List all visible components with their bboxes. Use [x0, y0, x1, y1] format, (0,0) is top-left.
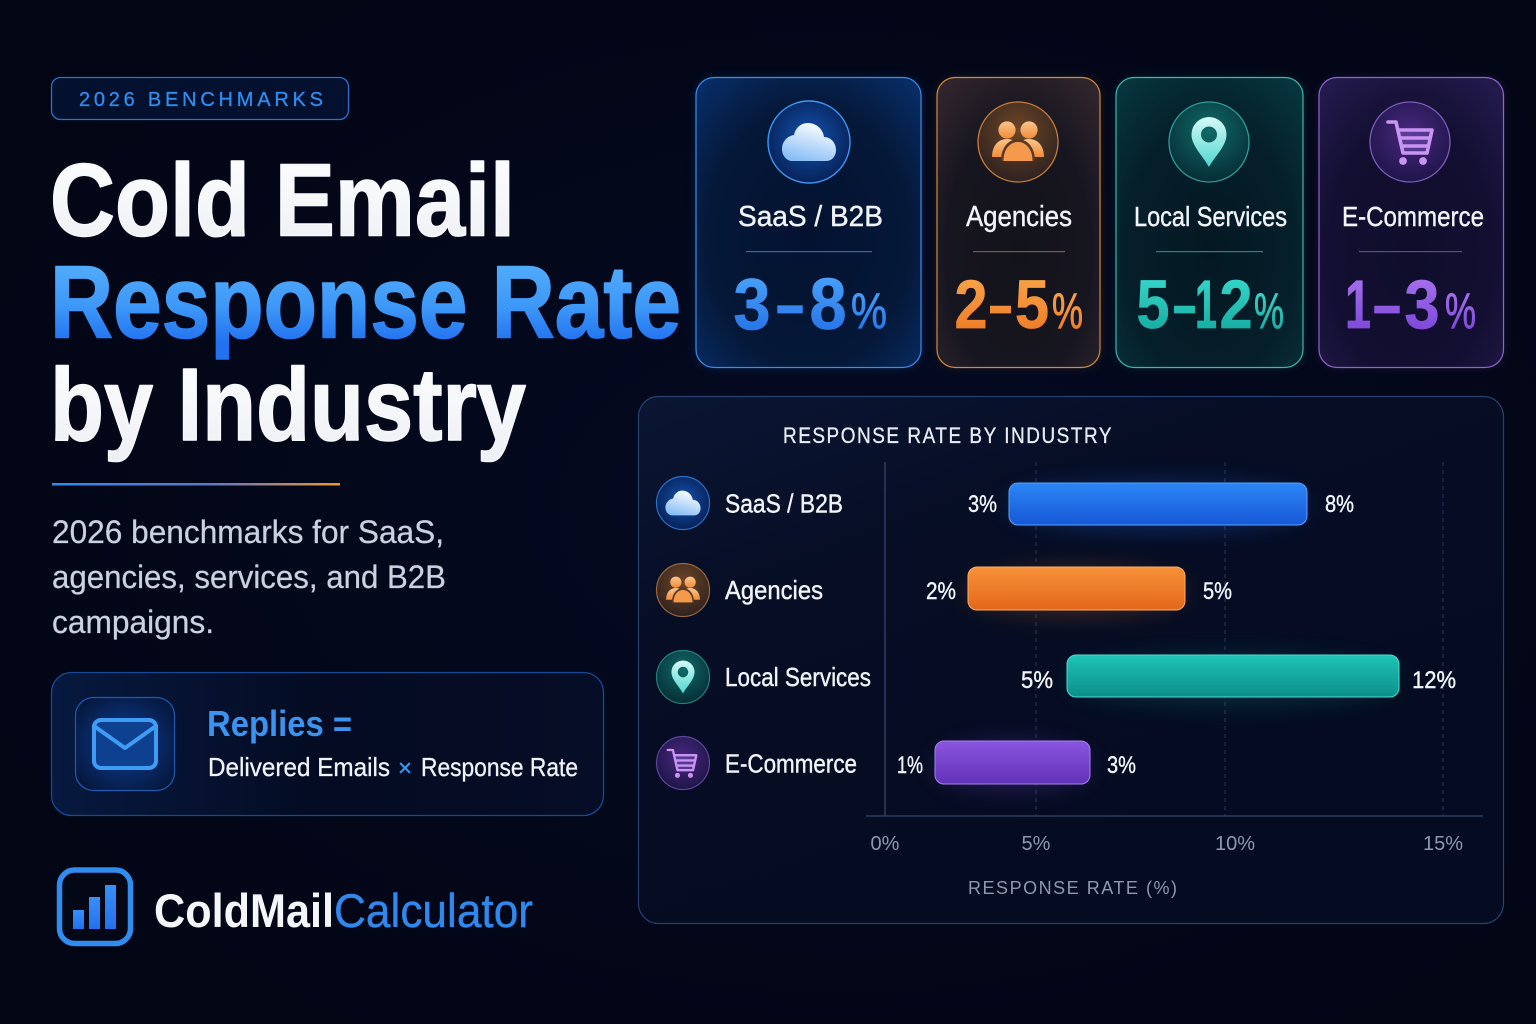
wordmark: ColdMail: [154, 884, 334, 937]
row: Local Services: [656, 650, 871, 704]
formula text: ×: [398, 755, 412, 782]
badge: 2026 benchmarks: 2026 BENCHMARKS: [79, 89, 323, 111]
value: 2-5%: –: [989, 266, 1012, 343]
bar value labels: 3%: [1107, 752, 1136, 779]
bar value labels: 3%: [968, 491, 997, 518]
formula text: [207, 703, 578, 782]
title divider: [52, 483, 340, 486]
bar: Local Services: [1067, 655, 1399, 697]
label: E-Commerce: [1342, 201, 1484, 232]
bar value labels: 8%: [1325, 491, 1354, 518]
wordmark: [154, 884, 533, 937]
icon: bar chart logo: [60, 870, 130, 944]
axis tick labels: 5%: [1022, 833, 1051, 855]
formula panel: [52, 672, 604, 816]
value: 5-12%: –: [1173, 266, 1196, 343]
badge: 2026 benchmarks: [52, 78, 348, 120]
icon: cloud: [768, 101, 850, 183]
row: E-Commerce: E-Commerce: [725, 748, 857, 778]
icon: people: [978, 102, 1058, 182]
panel: response rate chart: [638, 396, 1504, 924]
bar value labels: 5%: [1021, 667, 1053, 694]
value: 2-5%: 2: [954, 266, 988, 343]
formula text: Delivered Emails: [208, 752, 390, 782]
value: 5-12%: 1: [1195, 266, 1217, 343]
subtitle: [52, 514, 446, 640]
icon: envelope: [76, 698, 174, 790]
axis tick labels: [871, 833, 1463, 855]
icon: map pin: [1169, 102, 1249, 182]
title: [50, 142, 681, 462]
axis tick labels: 10%: [1215, 833, 1255, 855]
value: 3-8%: [734, 265, 887, 345]
bar value labels: [897, 491, 1456, 779]
bar value labels: 1%: [897, 752, 923, 779]
title: Response Rate: [50, 244, 681, 360]
bar value labels: 5%: [1203, 578, 1232, 605]
bar: E-Commerce: [935, 741, 1090, 784]
bar value labels: 12%: [1412, 667, 1456, 694]
brand logo: [60, 870, 533, 944]
value: 1-3%: –: [1373, 266, 1401, 343]
value: 3-8%: 3: [734, 265, 770, 345]
wordmark: Calculator: [334, 884, 533, 937]
row: Agencies: [656, 564, 823, 616]
value: 1-3%: %: [1445, 283, 1476, 339]
row: Agencies: Agencies: [725, 575, 823, 605]
value: 2-5%: [954, 266, 1083, 343]
card: Local Services: [1115, 77, 1305, 368]
title: Cold Email: [50, 142, 515, 258]
bar chart: [866, 462, 1483, 816]
subtitle: campaigns.: [52, 604, 214, 640]
value: 5-12%: [1136, 266, 1284, 343]
card: SaaS / B2B: [695, 77, 922, 368]
row: Local Services: Local Services: [725, 662, 871, 692]
value: 3-8%: –: [776, 265, 804, 345]
value: 5-12%: 2: [1220, 266, 1252, 343]
value: 3-8%: 8: [810, 265, 846, 345]
label: SaaS / B2B: [738, 201, 883, 233]
row: SaaS / B2B: [656, 476, 843, 530]
value: 1-3%: 1: [1345, 266, 1371, 343]
bar: SaaS / B2B: [1009, 483, 1307, 525]
title: by Industry: [50, 347, 526, 462]
value: 2-5%: 5: [1015, 266, 1049, 343]
value: 5-12%: %: [1254, 283, 1284, 339]
axis tick labels: 0%: [871, 833, 900, 855]
label: Local Services: [1134, 201, 1287, 232]
formula text: Response Rate: [421, 752, 578, 782]
subtitle: 2026 benchmarks for SaaS,: [52, 514, 444, 550]
row: SaaS / B2B: SaaS / B2B: [725, 488, 843, 518]
value: 3-8%: %: [851, 283, 887, 339]
value: 1-3%: [1345, 266, 1476, 343]
label: Agencies: [966, 201, 1072, 233]
subtitle: agencies, services, and B2B: [52, 559, 446, 595]
card: Agencies: [936, 77, 1102, 368]
icon: shopping cart: [1370, 102, 1450, 182]
value: 2-5%: %: [1052, 283, 1083, 339]
axis title: RESPONSE RATE (%): [968, 878, 1177, 898]
axis tick labels: 15%: [1423, 833, 1463, 855]
bar value labels: 2%: [926, 578, 956, 605]
formula text: Replies =: [207, 703, 352, 744]
value: 1-3%: 3: [1404, 266, 1440, 343]
row: E-Commerce: [656, 736, 857, 790]
chart title: RESPONSE RATE BY INDUSTRY: [783, 423, 1113, 448]
bar: Agencies: [968, 567, 1185, 610]
card: E-Commerce: [1318, 77, 1505, 368]
value: 5-12%: 5: [1136, 266, 1170, 343]
